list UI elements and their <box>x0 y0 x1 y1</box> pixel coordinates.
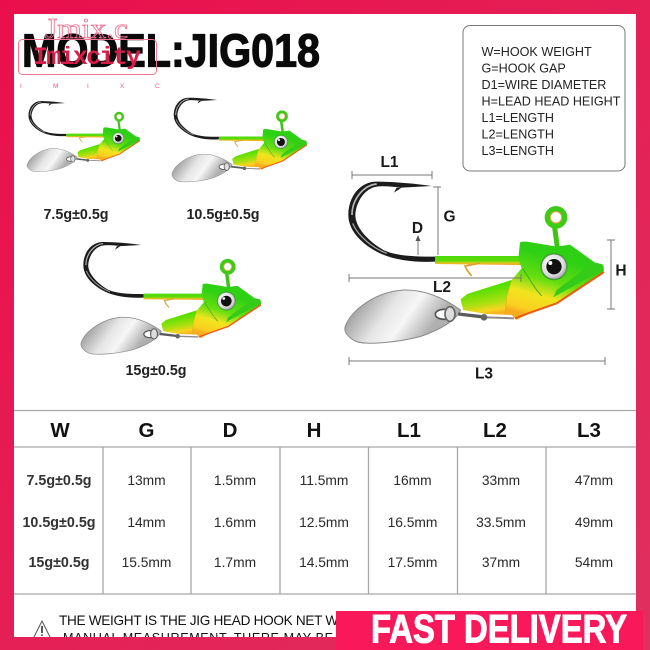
caption 7.5g: 7.5g±0.5g <box>43 207 109 223</box>
table values: 15.5mm <box>122 555 171 570</box>
footer text: THE WEIGHT IS THE JIG HEAD HOOK NET WEIGHT <box>59 613 378 628</box>
table values: 1.7mm <box>214 555 256 570</box>
table values: 49mm <box>575 515 613 530</box>
legend box <box>463 26 625 171</box>
table header: W <box>50 419 70 442</box>
legend text: L1=LENGTH <box>482 111 554 125</box>
watermark logo <box>18 13 160 90</box>
table values: 14mm <box>127 515 166 530</box>
legend text: L2=LENGTH <box>482 128 554 142</box>
table header: L2 <box>483 419 507 442</box>
table header: D <box>223 419 237 442</box>
table values: 33.5mm <box>476 515 526 530</box>
watermark logo: IMIXC <box>20 83 160 90</box>
legend text: G=HOOK GAP <box>482 62 566 76</box>
row labels <box>22 473 96 571</box>
jig large <box>345 182 604 343</box>
legend text: L3=LENGTH <box>482 144 554 158</box>
row labels: 7.5g±0.5g <box>26 473 92 489</box>
row labels: 15g±0.5g <box>28 555 90 571</box>
watermark logo: Imixcity <box>33 43 141 72</box>
dimension labels: L2 <box>433 279 451 296</box>
table grid <box>14 410 636 594</box>
legend text: W=HOOK WEIGHT <box>482 45 592 59</box>
table values: 54mm <box>575 555 613 570</box>
dimension labels <box>380 154 627 382</box>
watermark logo: Jmix.c <box>45 13 128 45</box>
table values: 33mm <box>482 473 520 488</box>
table header: L3 <box>577 419 601 442</box>
table values: 11.5mm <box>300 473 348 488</box>
table values: 17.5mm <box>388 555 437 570</box>
legend text <box>482 45 621 158</box>
table values: 1.5mm <box>214 473 256 488</box>
dimension labels: G <box>443 208 456 226</box>
large jig with dimensions <box>345 154 627 382</box>
footer note <box>34 616 336 637</box>
table values: 37mm <box>482 555 520 570</box>
icon: warning triangle <box>34 620 50 637</box>
table values: 47mm <box>575 473 613 488</box>
footer text <box>59 616 336 637</box>
jig 10.5g <box>172 98 307 182</box>
caption 10.5g: 10.5g±0.5g <box>186 207 260 223</box>
dimension labels: H <box>615 262 627 280</box>
spec table <box>14 410 636 594</box>
table header: L1 <box>397 419 421 442</box>
table values: 16.5mm <box>388 515 437 530</box>
table values <box>122 473 613 570</box>
dimension labels: D <box>412 220 423 237</box>
table header: G <box>139 419 154 442</box>
legend text: H=LEAD HEAD HEIGHT <box>482 94 621 108</box>
dimension labels: L1 <box>380 154 399 171</box>
jig 15g <box>81 242 261 354</box>
table values: 12.5mm <box>299 515 349 530</box>
table header: H <box>307 419 321 442</box>
legend text: D1=WIRE DIAMETER <box>482 78 606 92</box>
table values: 1.6mm <box>214 515 256 530</box>
table values: 16mm <box>393 473 432 488</box>
jig 7.5g <box>27 101 140 172</box>
table values: 14.5mm <box>299 555 349 570</box>
table header <box>50 419 601 442</box>
title: MODEL:JIG018 <box>22 24 320 76</box>
row labels: 10.5g±0.5g <box>22 515 96 531</box>
footer text: MANUAL MEASUREMENT, THERE MAY BE ERRORS <box>63 631 395 645</box>
table values: 13mm <box>127 473 166 488</box>
caption 15g: 15g±0.5g <box>125 363 187 379</box>
dimension labels: L3 <box>475 366 493 382</box>
arrow D <box>416 235 420 241</box>
dimension lines <box>349 171 615 365</box>
